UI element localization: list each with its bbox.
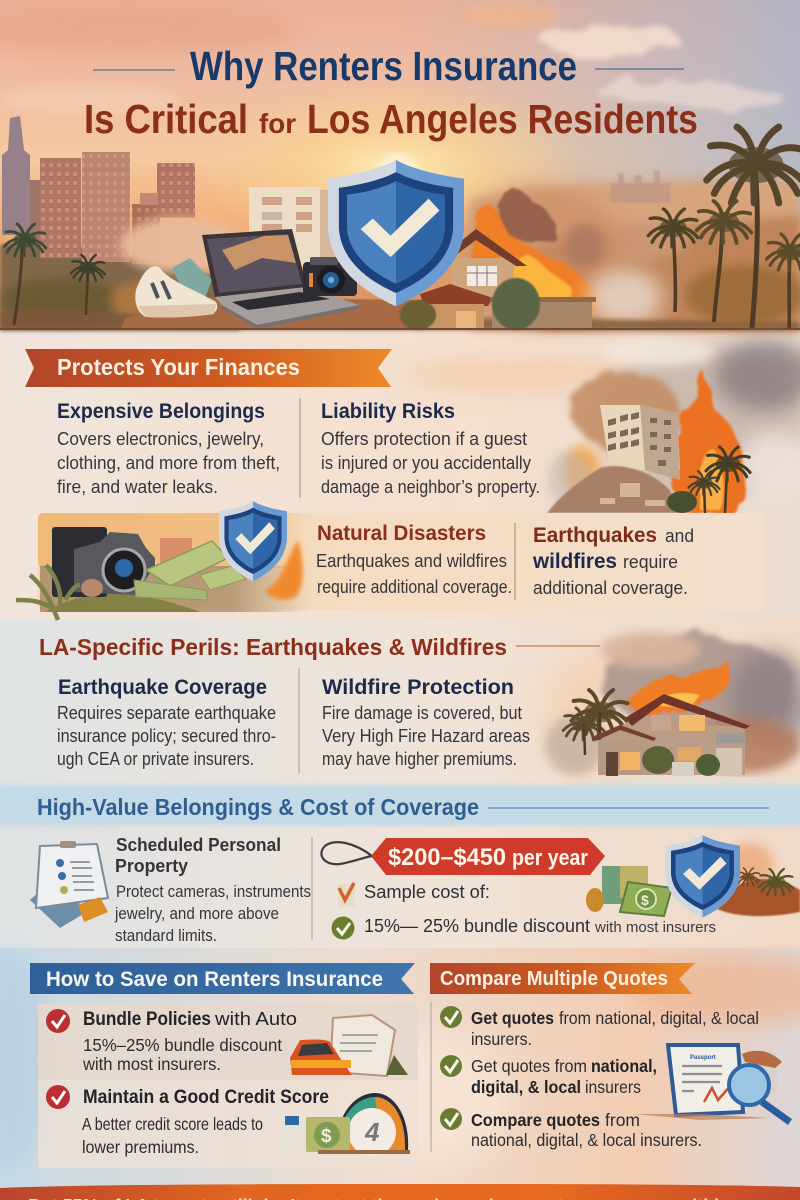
illustration: camera, cash and shield	[16, 513, 310, 620]
illustration: collapsing building with fire	[547, 338, 800, 513]
item: bundle policies: Bundle Policies	[83, 1009, 211, 1030]
text block: wildfire protection	[322, 676, 530, 769]
quote item 1: insurers.	[471, 1029, 532, 1049]
title: for	[259, 108, 296, 139]
text block: scheduled personal property: Property	[115, 856, 188, 876]
text block: earthquake coverage: Earthquake Coverage	[58, 676, 267, 699]
banner: protects your finances: Protects Your Finances	[57, 354, 300, 380]
illustration: cash, shield and palms: $	[641, 892, 649, 908]
quote item 3	[440, 1108, 702, 1150]
hero illustration: Los Angeles skyline at sunset	[0, 0, 800, 330]
text block: wildfire protection: Very High Fire Hazard areas	[322, 726, 530, 746]
quote item 1	[440, 1006, 759, 1049]
heading: LA-specific perils: LA-Specific Perils: Earthquakes & Wildfires	[39, 634, 507, 660]
panel: high-value belongings and cost of coverage	[0, 785, 800, 945]
banner: compare multiple quotes: Compare Multiple Quotes	[440, 967, 668, 990]
item: bundle policies: 15%–25% bundle discount	[83, 1035, 282, 1055]
item: credit score: A better credit score leads to	[82, 1114, 263, 1134]
illustration: policy document and magnifier: Passport	[690, 1055, 716, 1061]
illustration: cash, shield and palms	[586, 835, 800, 918]
panel: compare multiple quotes	[430, 963, 790, 1150]
sample cost line	[338, 882, 490, 907]
illustration: credit gauge and cash: 4	[364, 1117, 380, 1147]
item: credit score: lower premiums.	[82, 1137, 199, 1157]
text block: earthquakes and wildfires: and	[665, 526, 694, 546]
icon: shield	[219, 501, 287, 581]
text block: earthquake coverage: Requires separate earthquake	[57, 703, 276, 723]
illustration: car and document	[290, 1015, 408, 1076]
text block: natural disasters: Earthquakes and wildfires	[316, 551, 507, 571]
item: bundle policies: with most insurers.	[82, 1054, 221, 1074]
text block: earthquake coverage: insurance policy; secured thro-	[57, 726, 276, 746]
quote item 1: from national, digital, & local	[559, 1008, 759, 1028]
title	[84, 43, 698, 142]
text block: expensive belongings: Covers electronics, jewelry,	[57, 429, 264, 449]
heading band	[0, 785, 800, 826]
burning house	[400, 229, 596, 330]
camera	[303, 257, 357, 296]
price tag: $200–$450	[388, 844, 506, 871]
text block: scheduled personal property: standard limits.	[115, 927, 217, 945]
heading band: High-Value Belongings & Cost of Coverage	[37, 794, 479, 820]
bundle discount line	[332, 916, 716, 940]
item: bundle policies: with Auto	[214, 1009, 297, 1029]
text block: expensive belongings: clothing, and more from theft,	[57, 453, 280, 473]
text block: liability risks: Liability Risks	[321, 400, 455, 423]
title: Is Critical	[84, 96, 248, 142]
quote item 2: digital, & local	[471, 1077, 581, 1097]
page background	[0, 330, 800, 1188]
quote item 3: from	[605, 1110, 640, 1130]
sample cost line: Sample cost of:	[364, 882, 490, 902]
price tag	[321, 838, 605, 875]
text block: expensive belongings: Expensive Belongings	[57, 400, 265, 423]
illustration: credit gauge and cash	[279, 1093, 410, 1156]
left skyline	[2, 116, 195, 264]
illustration: house on fire	[545, 632, 800, 785]
palm trees	[4, 127, 800, 328]
footer band	[0, 1184, 800, 1200]
quote item 3: Compare quotes	[471, 1110, 600, 1130]
text block: wildfire protection: Fire damage is covered, but	[322, 703, 522, 723]
illustration: policy document and magnifier	[635, 1045, 790, 1122]
text block: earthquakes and wildfires: Earthquakes	[533, 524, 657, 547]
text block: scheduled personal property: jewelry, and more above	[114, 905, 279, 923]
lower ground	[0, 308, 800, 330]
banner: compare multiple quotes	[430, 963, 695, 994]
distant hills and haze	[470, 180, 800, 330]
mid apartment building	[249, 187, 340, 267]
text block: earthquakes and wildfires	[532, 524, 694, 598]
text block: liability risks: is injured or you accidentally	[321, 453, 531, 473]
title: Los Angeles Residents	[307, 96, 698, 142]
bundle discount line: with most insurers	[594, 920, 716, 936]
right fire and smoke	[455, 185, 663, 328]
text block: natural disasters: require additional coverage.	[317, 577, 512, 597]
laptop	[202, 229, 359, 329]
icon: clipboard checklist	[30, 841, 108, 928]
text block: scheduled personal property: Scheduled Personal	[116, 835, 281, 855]
price tag: per year	[512, 845, 588, 870]
quote item 1: Get quotes	[471, 1008, 554, 1028]
panel: protects your finances	[16, 338, 800, 620]
text block: expensive belongings: fire, and water leaks.	[57, 477, 218, 497]
text block: scheduled personal property	[114, 835, 311, 945]
table top	[120, 298, 440, 330]
text block: earthquakes and wildfires: require	[623, 552, 678, 572]
banner: protects your finances	[25, 349, 392, 387]
item: bundle policies	[46, 1009, 297, 1074]
text block: wildfire protection: Wildfire Protection	[322, 676, 514, 699]
text block: wildfire protection: may have higher premiums.	[322, 749, 517, 769]
panel: LA-specific perils	[39, 632, 800, 785]
quote item 3: national, digital, & local insurers.	[471, 1130, 702, 1150]
title: Why Renters Insurance	[190, 43, 577, 89]
text block: natural disasters: Natural Disasters	[317, 522, 486, 545]
text block: natural disasters	[316, 522, 512, 597]
panel: how to save on renters insurance	[30, 963, 790, 1168]
quote item 2: Get quotes from	[471, 1056, 587, 1076]
bundle discount line: 15%— 25% bundle discount	[364, 916, 590, 936]
main shield icon	[328, 153, 464, 306]
text block: earthquake coverage: ugh CEA or private insurers.	[57, 749, 254, 769]
illustration: credit gauge and cash: $	[321, 1126, 332, 1147]
text block: earthquakes and wildfires: wildfires	[532, 550, 617, 573]
text block: expensive belongings	[57, 400, 280, 497]
item: credit score	[46, 1085, 329, 1157]
banner: how to save: How to Save on Renters Insurance	[46, 967, 383, 991]
text block: scheduled personal property: Protect cameras, instruments	[116, 883, 311, 901]
item: credit score: Maintain a Good Credit Score	[83, 1087, 329, 1108]
text block: liability risks: damage a neighbor’s property.	[321, 477, 540, 497]
quote item 2: insurers	[585, 1077, 641, 1097]
quote item 2	[440, 1055, 657, 1097]
text block: earthquakes and wildfires: additional coverage.	[533, 578, 688, 598]
text block: earthquake coverage	[57, 676, 276, 769]
quote item 2: national,	[591, 1056, 657, 1076]
text block: liability risks: Offers protection if a guest	[321, 429, 527, 449]
text block: liability risks	[321, 400, 540, 497]
sneakers	[135, 258, 217, 318]
panel: natural disasters	[16, 501, 765, 620]
